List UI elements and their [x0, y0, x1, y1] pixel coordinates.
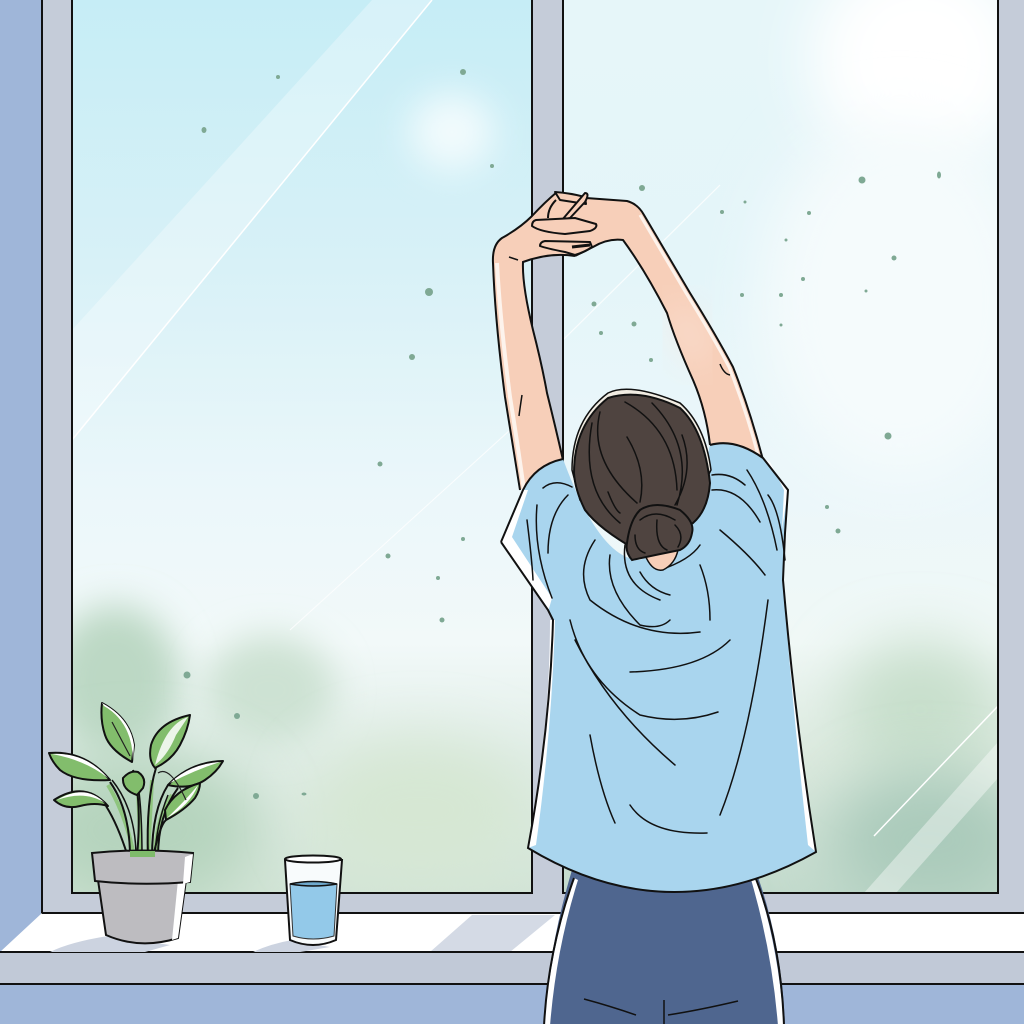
- hair: [572, 389, 711, 570]
- leaf highlights: [52, 703, 220, 818]
- person: [493, 192, 816, 1024]
- window pane outlines and mullion: [72, 0, 998, 893]
- dust specks floating outside: [184, 69, 941, 799]
- T-shirt: [501, 443, 816, 892]
- window sill: [0, 913, 1024, 984]
- shirt folds: [527, 470, 785, 833]
- plant leaves: [49, 703, 223, 820]
- plant stem fill: [108, 780, 172, 856]
- trousers: [544, 866, 785, 1024]
- plant pot: [92, 850, 193, 943]
- arms and clasped hands: [493, 192, 763, 490]
- left window pane with sky and blurred trees: [73, 0, 531, 892]
- shadow of glass on sill: [253, 940, 330, 952]
- right window pane with sky, sun glare and blurred trees: [563, 0, 1024, 910]
- plant stems: [106, 768, 178, 857]
- leaf veins: [112, 722, 186, 800]
- shadow of plant pot on sill: [50, 936, 170, 952]
- interlocked fingers: [532, 192, 596, 255]
- glass of water: [285, 856, 342, 945]
